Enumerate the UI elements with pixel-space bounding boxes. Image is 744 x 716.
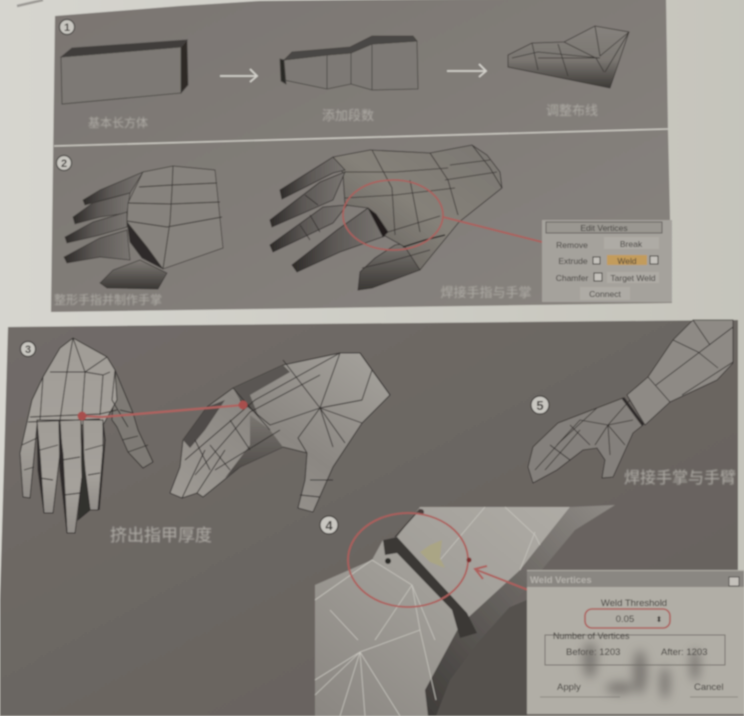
- panel: Edit Vertices rollout: Remove: [556, 240, 588, 250]
- panel: Edit Vertices rollout: Extrude: [558, 256, 588, 266]
- panel: Weld Vertices dialog: [527, 570, 744, 714]
- panel: lower steps 3, 4 and 5: [0, 320, 744, 716]
- panel: Edit Vertices rollout: Connect: [589, 289, 621, 299]
- model: fingers and palm block: [64, 166, 223, 289]
- panel: Edit Vertices rollout: Weld: [617, 256, 637, 266]
- shape: adjusted topology: [508, 26, 629, 88]
- panel: Edit Vertices rollout: Chamfer: [556, 273, 588, 283]
- panel: top steps 1 and 2: [51, 0, 672, 312]
- panel: Weld Vertices dialog: Number of Vertices: [553, 631, 630, 641]
- callout: red link between hand views: [78, 400, 248, 420]
- badge: step 3: 3: [25, 344, 31, 356]
- callout: red circle and leader to Weld: [343, 180, 602, 252]
- panel: Edit Vertices rollout: Target Weld: [610, 273, 656, 283]
- label: extrude nail thickness: 挤出指甲厚度: [110, 526, 212, 545]
- badge: step 3: [20, 342, 36, 356]
- model: welded hand: [270, 145, 502, 290]
- arrow: box to segments: [220, 69, 257, 82]
- panel: Edit Vertices rollout: Edit Vertices: [580, 223, 628, 233]
- label: adjust topology: 调整布线: [546, 103, 598, 118]
- smudges: blurred watermark over dialog: [583, 642, 700, 699]
- label: basic box: 基本长方体: [88, 115, 148, 130]
- label: shape fingers and make palm: 整形手指并制作手掌: [54, 292, 162, 307]
- panel: Weld Vertices dialog: Before: 1203: [566, 647, 620, 658]
- shape: basic box: [61, 40, 188, 104]
- panel: Weld Vertices dialog: ⬍: [656, 615, 662, 624]
- model: hand and forearm: [528, 320, 733, 483]
- badge: step 2: [56, 156, 72, 170]
- panel: Weld Vertices dialog: Apply: [557, 682, 581, 693]
- model: hand front view: [20, 338, 153, 533]
- badge: step 5: 5: [536, 398, 544, 413]
- closeup: weld detail: [315, 505, 615, 716]
- panel: Weld Vertices dialog: After: 1203: [661, 647, 707, 658]
- model: hand side view: [170, 353, 390, 512]
- panel: Weld Vertices dialog: Cancel: [694, 682, 724, 693]
- badge: step 1: [60, 20, 74, 34]
- panel: Weld Vertices dialog: Weld Vertices: [530, 575, 592, 586]
- badge: step 4: [320, 516, 338, 534]
- badge: step 5: [531, 396, 549, 414]
- badge: step 4: 4: [325, 518, 333, 533]
- callout: red weld circle and arrow: [348, 513, 587, 613]
- panel: Edit Vertices rollout: [542, 220, 672, 302]
- panel: Weld Vertices dialog: Weld Threshold: [601, 598, 667, 609]
- badge: step 2: 2: [61, 158, 67, 170]
- panel: Weld Vertices dialog: 0.05: [616, 614, 634, 625]
- badge: step 1: 1: [64, 22, 70, 34]
- label: weld fingers and palm: 焊接手指与手掌: [440, 285, 532, 300]
- shape: box with added segments: [280, 36, 418, 90]
- label: add segments: 添加段数: [322, 108, 374, 123]
- label: weld palm and arm: 焊接手掌与手臂: [624, 469, 736, 487]
- panel: Edit Vertices rollout: Break: [620, 239, 643, 249]
- arrow: segments to topology: [447, 64, 486, 77]
